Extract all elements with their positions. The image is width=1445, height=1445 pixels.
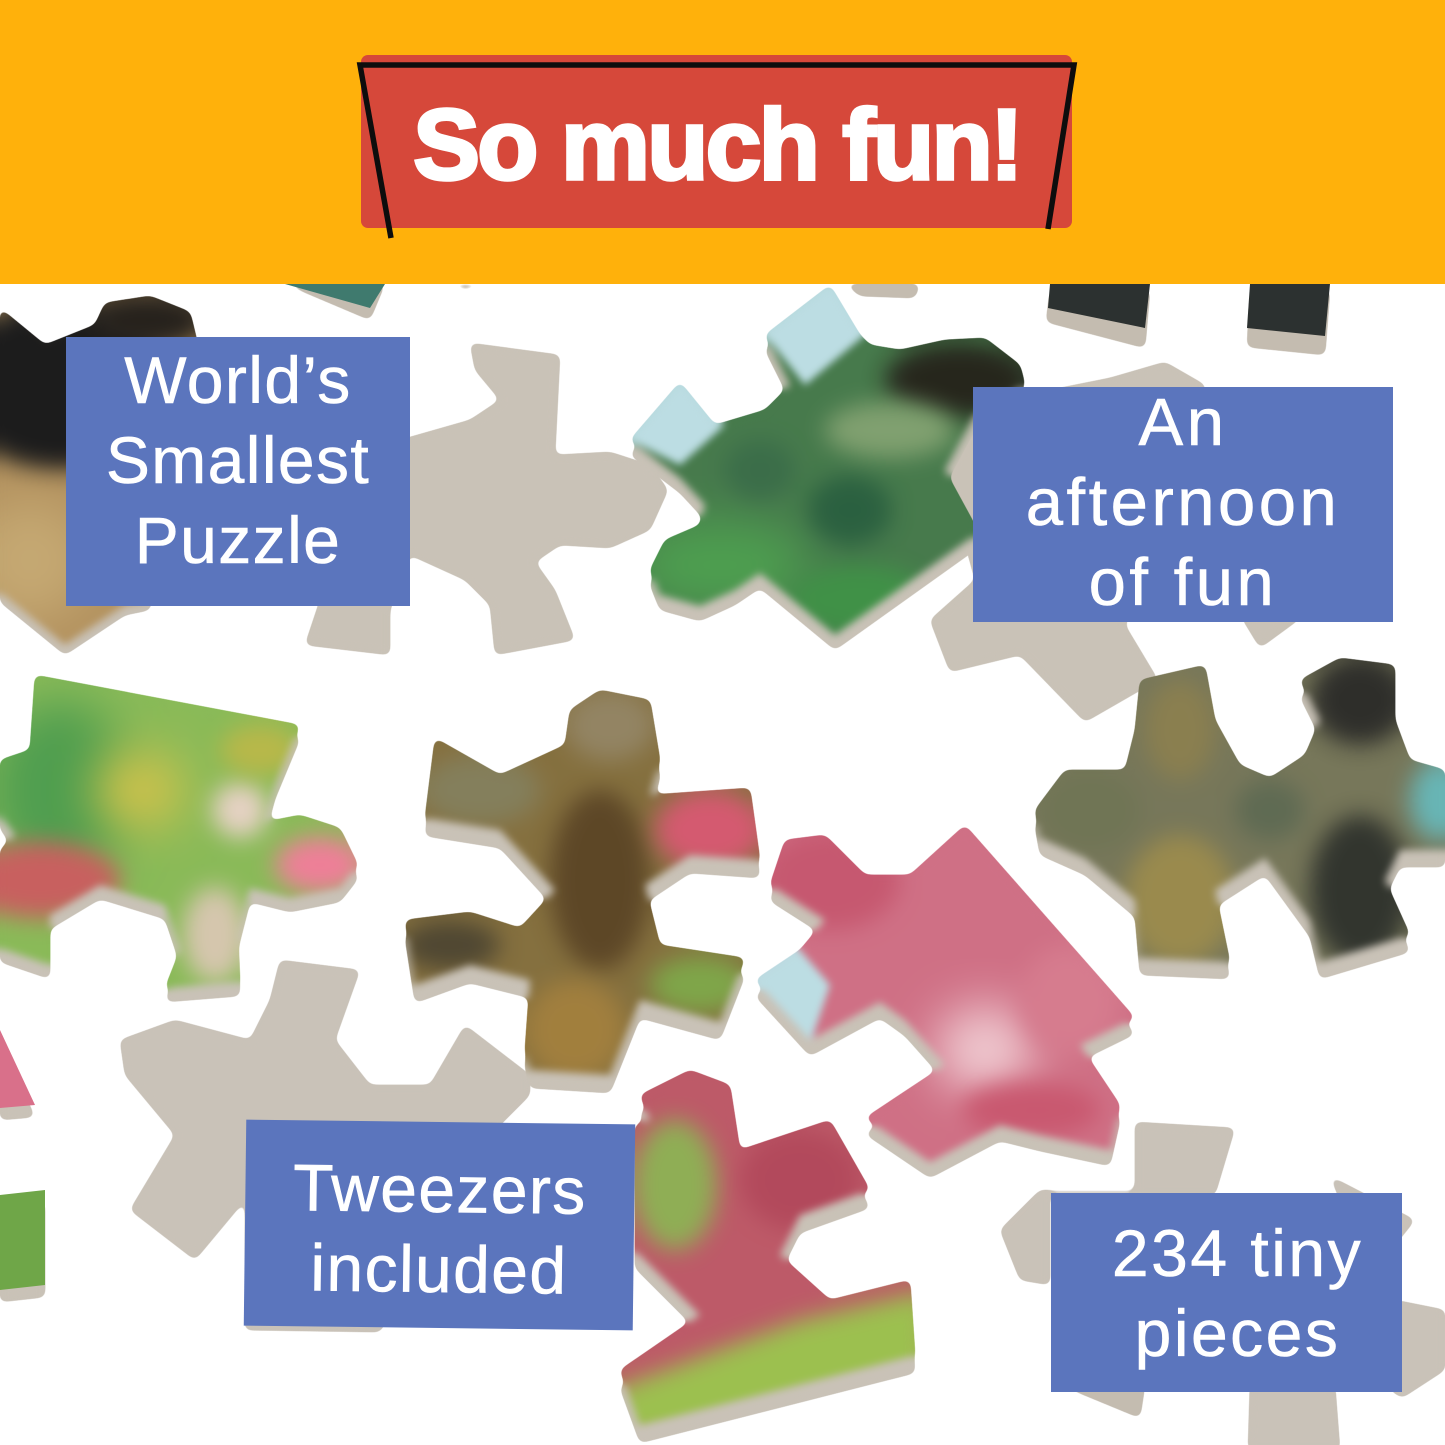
grey piece bottom left xyxy=(120,960,530,1332)
piece: pink centre right xyxy=(750,820,1140,1180)
piece: dark olive right xyxy=(1030,650,1445,980)
label: Tweezers included xyxy=(244,1120,635,1330)
label: An afternoon of fun xyxy=(973,387,1393,622)
heading: red ribbon: So much fun! xyxy=(413,89,1021,201)
grey piece top right behind label xyxy=(930,362,1305,722)
piece: pink and green bottom xyxy=(610,1065,930,1443)
grey pieces bottom right xyxy=(1000,1122,1445,1445)
label: Tweezers included: included xyxy=(310,1230,568,1308)
label: An afternoon of fun: An xyxy=(1139,385,1227,460)
label: An afternoon of fun: afternoon xyxy=(1026,465,1340,540)
piece: green with light blue tabs xyxy=(620,280,1035,650)
label: World's Smallest Puzzle: Smallest xyxy=(106,423,370,497)
label: 234 tiny pieces: 234 tiny xyxy=(1112,1216,1363,1290)
label: 234 tiny pieces xyxy=(1051,1193,1402,1392)
label: World's Smallest Puzzle: World’s xyxy=(124,343,352,417)
piece: green and pink left xyxy=(0,670,365,1002)
label: An afternoon of fun: of fun xyxy=(1089,545,1277,620)
small pieces left edge xyxy=(0,1030,46,1302)
label: 234 tiny pieces: pieces xyxy=(1135,1296,1340,1370)
heading: red ribbon xyxy=(356,55,1078,238)
piece: brown centre xyxy=(400,685,765,1095)
label: World's Smallest Puzzle: Puzzle xyxy=(135,503,341,577)
small cut-off pieces at top xyxy=(280,280,1340,355)
piece: dark and tan top left xyxy=(0,290,210,660)
banner: yellow background xyxy=(0,0,1445,284)
grey piece top centre xyxy=(300,343,668,655)
label: Tweezers included: Tweezers xyxy=(293,1150,587,1228)
label: World's Smallest Puzzle xyxy=(66,337,410,606)
